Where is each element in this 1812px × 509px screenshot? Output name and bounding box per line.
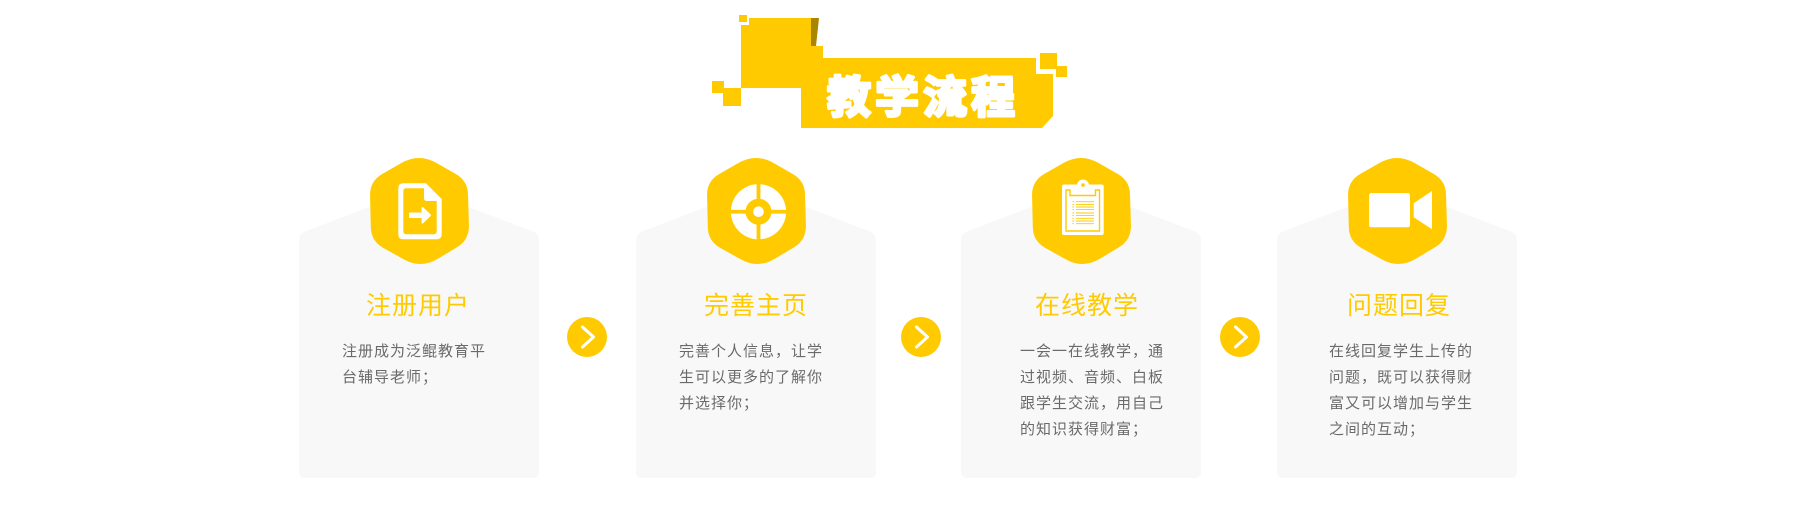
step description (342, 343, 486, 386)
arrow: step 2 to 3 (901, 317, 941, 357)
panel: 完善主页 (679, 158, 823, 412)
step description: 完善个人信息，让学 (679, 343, 823, 360)
step description (1329, 343, 1473, 438)
icon: clipboard (1032, 158, 1131, 264)
icon: video camera (1348, 158, 1447, 264)
panel: 问题回复 (1329, 158, 1473, 438)
step description: 过视频、音频、白板 (1020, 369, 1164, 386)
card background (636, 150, 876, 478)
arrow: step 1 to 2 (567, 317, 607, 357)
icon: target (707, 158, 806, 264)
card background (1277, 150, 1517, 478)
icon: document with arrow (370, 158, 469, 264)
card background (299, 150, 539, 478)
step description: 生可以更多的了解你 (679, 369, 823, 386)
arrow: step 3 to 4 (1220, 317, 1260, 357)
step description: 注册成为泛鲲教育平 (342, 343, 486, 360)
heading: 教学流程 banner (712, 15, 1067, 128)
step description: 的知识获得财富； (1020, 421, 1148, 438)
card background (961, 150, 1201, 478)
step description: 在线回复学生上传的 (1329, 343, 1473, 360)
step description: 问题，既可以获得财 (1329, 369, 1473, 386)
step title: 在线教学 (1035, 292, 1139, 320)
step description: 并选择你； (679, 395, 759, 412)
panel: 在线教学 (1020, 158, 1164, 438)
banner shape and heading text (712, 15, 1067, 128)
step description: 富又可以增加与学生 (1329, 395, 1473, 412)
step description: 台辅导老师； (342, 369, 438, 386)
step description (679, 343, 823, 412)
banner shape and heading text: 教学流程 (827, 74, 1019, 122)
step description (1020, 343, 1164, 438)
step title: 完善主页 (704, 292, 808, 320)
step title: 问题回复 (1347, 292, 1451, 320)
step description: 跟学生交流，用自己 (1020, 395, 1164, 412)
panel: 注册用户 (342, 158, 486, 386)
step title: 注册用户 (366, 292, 470, 320)
step description: 一会一在线教学，通 (1020, 343, 1164, 360)
step description: 之间的互动； (1329, 421, 1425, 438)
